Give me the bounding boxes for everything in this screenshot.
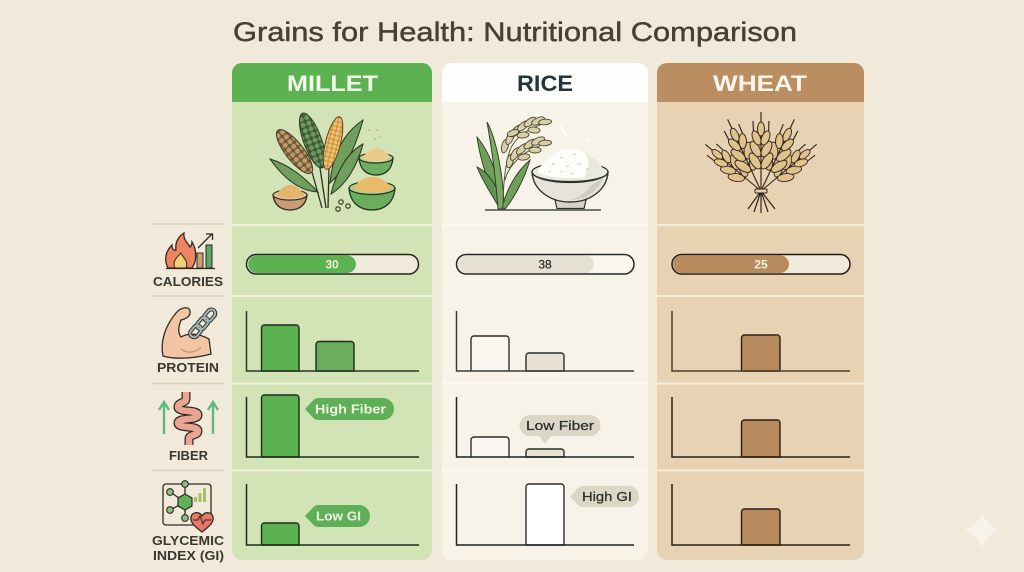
label: glycemic index: INDEX (GI) [153, 549, 224, 563]
millet fiber chart [246, 395, 419, 457]
label: glycemic index: GLYCEMIC [152, 534, 224, 548]
wheat glycemic chart [672, 484, 850, 545]
wheat header [657, 63, 864, 102]
millet header: MILLET [287, 71, 379, 96]
wheat calories bar: 25 [754, 258, 768, 272]
millet calories bar: 30 [325, 258, 339, 272]
wheat protein chart [672, 311, 850, 371]
callout: high fiber: High Fiber [315, 402, 386, 416]
callout: high gi: High GI [582, 489, 632, 504]
panel: wheat [657, 63, 864, 560]
millet calories bar [246, 254, 418, 274]
icon: calories flame and rising bars [166, 233, 215, 268]
icon: millet plant and bowls [270, 110, 395, 211]
icon: rice plant and bowl [477, 115, 608, 210]
callout: high fiber [305, 398, 394, 420]
wheat calories bar [672, 254, 850, 274]
millet header [232, 63, 432, 102]
rice header: RICE [517, 71, 573, 96]
label: glycemic index [152, 534, 224, 563]
callout: low fiber [520, 415, 600, 444]
rice protein chart [456, 311, 634, 371]
millet glycemic chart [246, 484, 419, 545]
icon: fiber intestine with arrows [159, 392, 218, 445]
panel: rice [442, 63, 648, 560]
title: Grains for Health: Nutritional Comparison [233, 17, 797, 47]
label: protein: PROTEIN [157, 361, 219, 375]
callout: high gi [570, 486, 639, 507]
rice calories bar [456, 254, 634, 274]
rice glycemic chart [456, 484, 639, 545]
label: calories: CALORIES [153, 275, 223, 289]
row labels column [152, 224, 224, 563]
callout: low gi: Low GI [316, 508, 361, 524]
icon: sparkle watermark [964, 512, 1000, 548]
wheat fiber chart [672, 397, 850, 457]
rice fiber chart [456, 397, 634, 457]
label: fiber: FIBER [169, 449, 208, 463]
icon: protein arm and chain [162, 308, 217, 358]
rice calories bar: 38 [538, 258, 552, 272]
wheat header: WHEAT [713, 71, 808, 96]
icon: glycemic index molecule and heart [163, 481, 213, 532]
callout: low gi [305, 505, 370, 527]
panel: millet [232, 63, 432, 560]
millet protein chart [246, 311, 419, 371]
rice header [442, 63, 648, 102]
icon: wheat bundle [697, 112, 825, 213]
callout: low fiber: Low Fiber [526, 418, 595, 433]
